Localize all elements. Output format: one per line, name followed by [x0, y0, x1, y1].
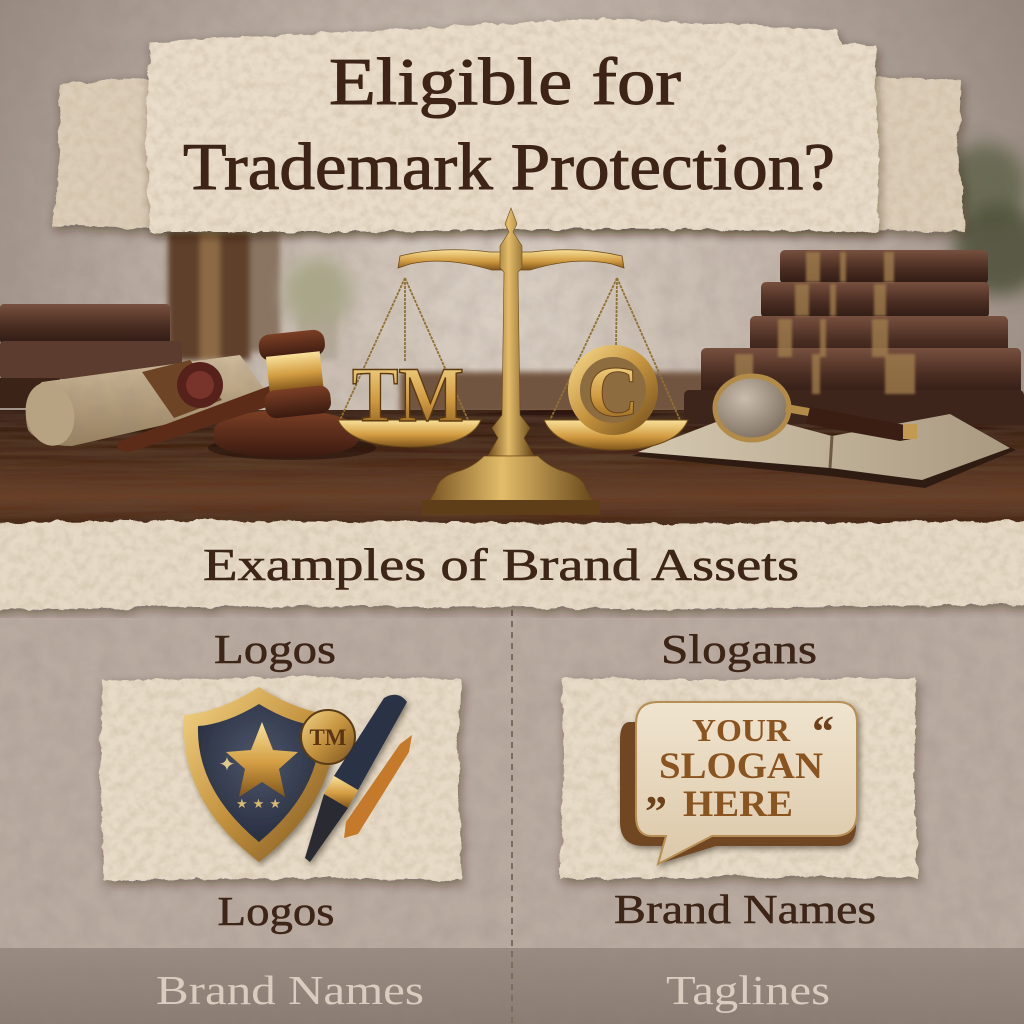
blurred background props	[168, 232, 338, 360]
label: Brand Names lower: Brand Names	[614, 886, 876, 932]
bottom strip	[0, 948, 1024, 1024]
footer: Taglines: Taglines	[666, 967, 830, 1013]
magnifying glass	[715, 376, 917, 441]
banner front	[146, 18, 878, 232]
slogan text: YOUR	[692, 712, 791, 748]
title banner	[52, 18, 965, 232]
label: Logos: Logos	[214, 626, 336, 672]
slogan text: HERE	[683, 784, 793, 825]
icon: TM badge: TM	[309, 725, 347, 750]
title text: Eligible for	[329, 45, 681, 119]
lower background	[0, 600, 1024, 950]
TM symbol: TM	[352, 351, 464, 438]
panel: logos card	[100, 677, 461, 881]
icon: shield	[184, 687, 334, 862]
balance scale	[338, 208, 688, 514]
scale: column	[488, 208, 534, 456]
copyright symbol	[574, 351, 652, 432]
icon: TM badge	[301, 710, 355, 764]
section heading: Examples of Brand Assets	[203, 540, 799, 590]
slogan text: SLOGAN	[659, 746, 823, 787]
scale: left pan	[338, 420, 481, 447]
slogan text: “	[812, 707, 834, 756]
icon: speech bubble	[620, 702, 857, 864]
scale: beam	[398, 250, 624, 270]
scale: right pan	[544, 420, 688, 450]
books: left stack	[0, 304, 182, 408]
panel: slogans card	[560, 678, 918, 879]
icon: fountain pen	[305, 695, 407, 862]
label: Logos lower: Logos	[218, 888, 334, 934]
icon: shield: ✦	[219, 754, 235, 776]
back shelf	[400, 372, 740, 414]
scale: base	[422, 456, 600, 514]
gavel	[118, 329, 376, 460]
blurred plants	[284, 143, 1024, 326]
slogan text	[645, 707, 834, 836]
open book	[632, 412, 1016, 488]
section band	[0, 520, 1024, 609]
section divider	[511, 610, 513, 1024]
footer: Brand Names: Brand Names	[156, 967, 424, 1013]
copyright symbol: C	[587, 352, 639, 432]
table	[0, 410, 1024, 526]
scroll with wax seal	[20, 355, 272, 450]
background wall	[0, 0, 1024, 430]
books: right stack	[684, 250, 1024, 424]
scale: chains	[340, 278, 680, 420]
icon: shield: ★★★	[236, 796, 286, 811]
title banner: Trademark Protection?	[183, 130, 835, 204]
banner back strip	[52, 76, 965, 232]
slogan text: ”	[645, 787, 667, 836]
label: Slogans: Slogans	[661, 626, 817, 672]
icon: pencil	[344, 735, 412, 838]
